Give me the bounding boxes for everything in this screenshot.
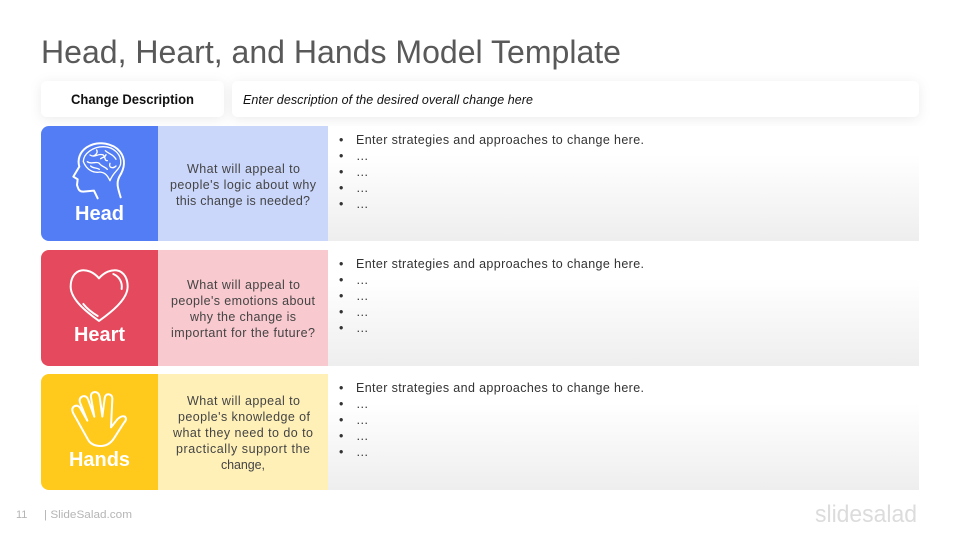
strategies list: head: • (339, 197, 343, 211)
strategies list: heart: Enter strategies and approaches to change here. (356, 257, 644, 271)
question panel: heart (158, 250, 328, 366)
question panel: hands: What will appeal to (187, 394, 300, 408)
strategies list: head: • (339, 181, 343, 195)
strategies list: heart: … (356, 305, 368, 319)
strategies list: heart: • (339, 273, 343, 287)
question panel: hands (158, 374, 328, 490)
strategies list: head: Enter strategies and approaches to change here. (356, 133, 644, 147)
strategies background: hands (328, 374, 919, 490)
panel: change description input: Enter description of the desired overall change here (243, 93, 533, 107)
icon: hand (72, 392, 126, 446)
panel: head row (41, 126, 919, 241)
strategies list: head: … (356, 197, 368, 211)
strategies list: heart: • (339, 257, 343, 271)
strategies list: head: … (356, 181, 368, 195)
question panel: hands: people's knowledge of (178, 410, 311, 424)
label: Head: Head (75, 203, 124, 225)
hands colour block (41, 374, 158, 490)
strategies list: heart: … (356, 273, 368, 287)
footer: page number: 11 (16, 509, 27, 521)
question panel: head: What will appeal to (187, 162, 300, 176)
strategies list: hands: • (339, 381, 343, 395)
strategies list: heart: … (356, 321, 368, 335)
panel: hands row (41, 374, 919, 490)
head colour block (41, 126, 158, 241)
question panel: heart: What will appeal to (187, 278, 300, 292)
question panel: head: people's logic about why (170, 178, 317, 192)
strategies list: head (339, 133, 644, 211)
strategies list: heart: • (339, 321, 343, 335)
strategies list: hands: … (356, 445, 368, 459)
question panel: heart: important for the future? (171, 326, 315, 340)
strategies background: head (328, 126, 919, 241)
strategies list: head: … (356, 165, 368, 179)
question panel: heart: people's emotions about (171, 294, 316, 308)
strategies list: hands: • (339, 413, 343, 427)
strategies background: heart (328, 250, 919, 366)
strategies list: hands: … (356, 397, 368, 411)
strategies list: hands: • (339, 429, 343, 443)
question panel: head: this change is needed? (176, 194, 310, 208)
strategies list: head: • (339, 133, 343, 147)
icon: head with brain (73, 143, 124, 198)
strategies list: heart: • (339, 305, 343, 319)
icon: heart (71, 270, 128, 321)
strategies list: heart (339, 257, 644, 335)
panel: change description input (232, 81, 919, 117)
strategies list: hands: • (339, 445, 343, 459)
strategies list: head: • (339, 149, 343, 163)
label: Hands: Hands (69, 449, 130, 471)
strategies list: hands (339, 381, 644, 459)
panel: change description label (41, 81, 224, 117)
title: Head, Heart, and Hands Model Template (41, 34, 621, 70)
strategies list: hands: … (356, 429, 368, 443)
panel: change description label: Change Description (71, 91, 194, 107)
strategies list: hands: … (356, 413, 368, 427)
question panel: hands: practically support the (176, 442, 310, 456)
question panel: hands: what they need to do to (172, 426, 313, 440)
strategies list: hands: Enter strategies and approaches to change here. (356, 381, 644, 395)
strategies list: hands: • (339, 397, 343, 411)
question panel: hands: change, (221, 458, 265, 472)
footer: logo: slidesalad (815, 501, 917, 528)
question panel: heart: why the change is (189, 310, 296, 324)
strategies list: heart: • (339, 289, 343, 303)
footer: site name: | SlideSalad.com (44, 509, 132, 521)
strategies list: head: … (356, 149, 368, 163)
strategies list: heart: … (356, 289, 368, 303)
panel: heart row (41, 250, 919, 366)
question panel: head (158, 126, 328, 241)
label: Heart: Heart (74, 324, 125, 346)
heart colour block (41, 250, 158, 366)
strategies list: head: • (339, 165, 343, 179)
